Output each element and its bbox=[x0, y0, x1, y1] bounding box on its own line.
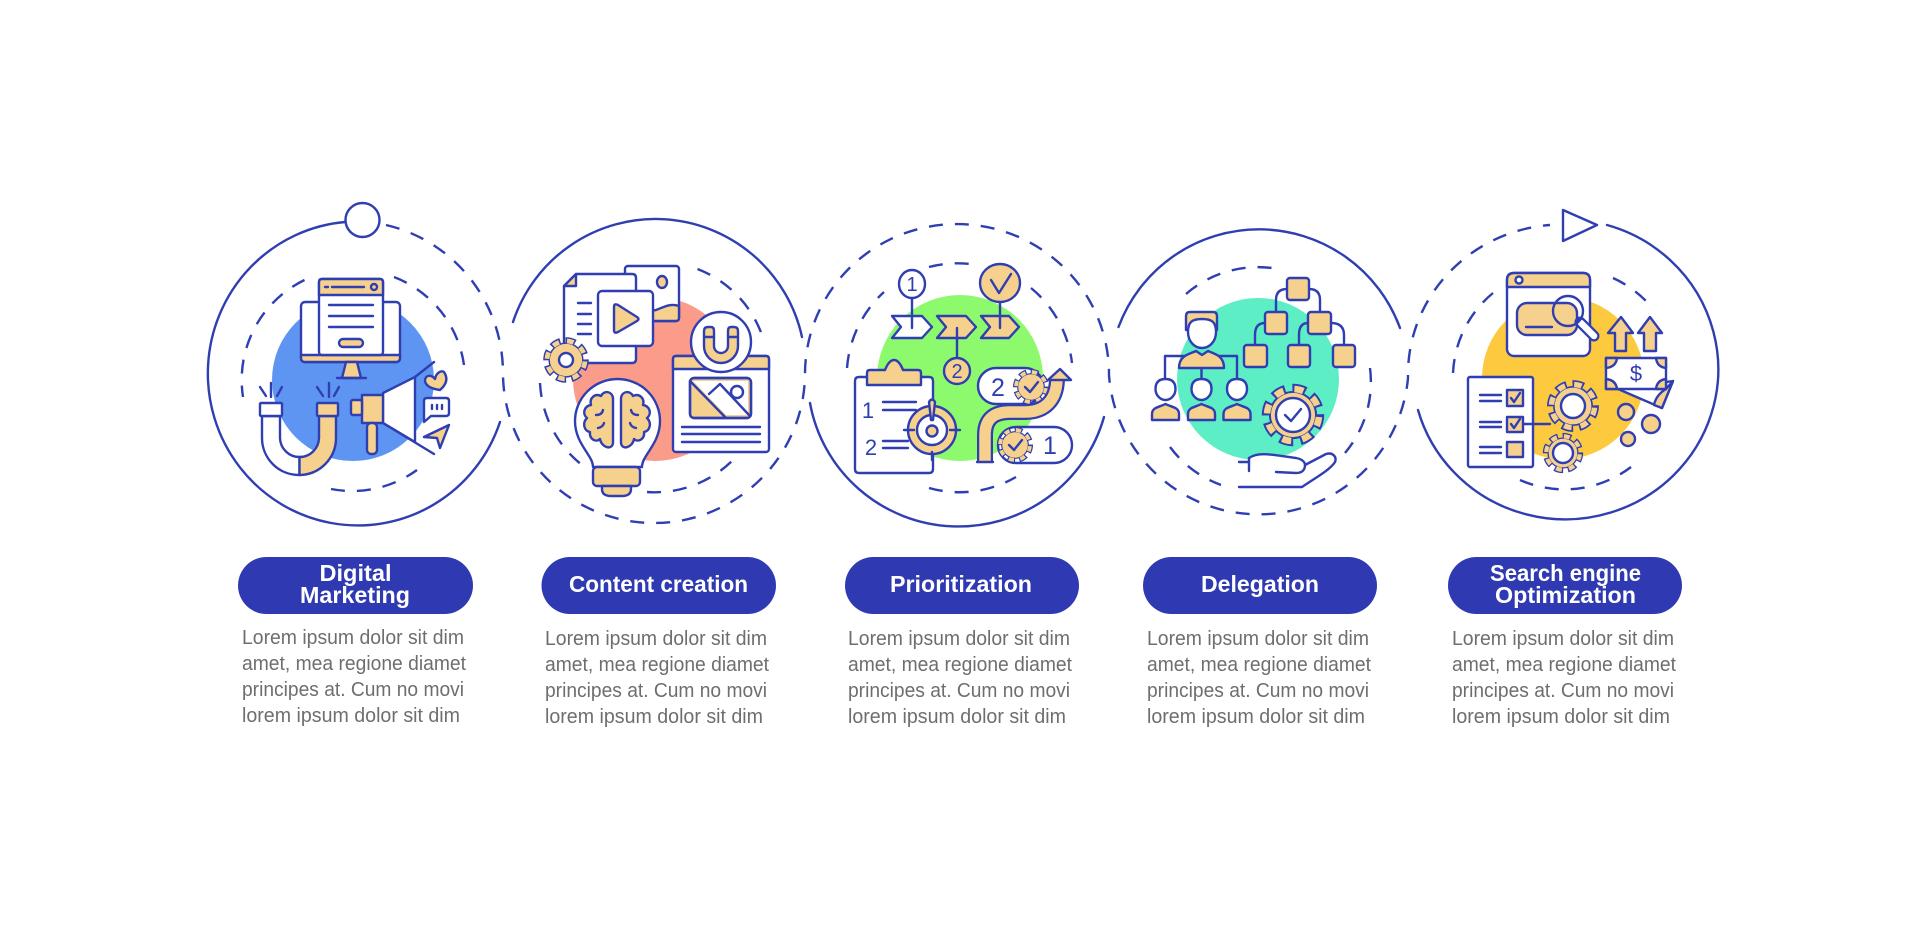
text block: Delegation: lorem ipsum dolor sit dim bbox=[1147, 706, 1365, 728]
text block: Prioritization: amet, mea regione diamet bbox=[848, 654, 1072, 676]
icon: megaphone bbox=[351, 362, 434, 454]
heading pill: Delegation: Delegation bbox=[1201, 571, 1319, 597]
icon: browser search bbox=[1507, 273, 1594, 356]
icon: clipboard with target: 2 bbox=[865, 435, 877, 460]
icon: document bbox=[564, 274, 636, 363]
solid connector arcs bbox=[208, 219, 1718, 526]
icon: magnet badge bbox=[691, 312, 751, 372]
text block: Prioritization: lorem ipsum dolor sit dim bbox=[848, 706, 1066, 728]
heading pill: Prioritization: Prioritization bbox=[890, 571, 1032, 597]
icon: step badge 2 bbox=[944, 358, 970, 384]
text block: Search engine Optimization: principes at. Cum no movi bbox=[1452, 680, 1674, 702]
panel: Delegation bbox=[1152, 267, 1371, 487]
dashed connector path bbox=[386, 224, 1550, 523]
inner dashed ring bbox=[242, 277, 464, 491]
text block: Content creation: principes at. Cum no movi bbox=[545, 680, 767, 702]
green blob bbox=[877, 295, 1043, 461]
icon: light bulb with brain bbox=[575, 379, 660, 496]
icon: gear bbox=[547, 341, 585, 379]
icon: paper plane bbox=[424, 425, 449, 448]
icon: priority pill 2: 2 bbox=[991, 374, 1005, 402]
heading pill: Digital Marketing bbox=[238, 557, 473, 614]
icon: magnet bbox=[260, 383, 339, 475]
icon: priority pill 2 bbox=[978, 368, 1046, 404]
text block: Prioritization: Lorem ipsum dolor sit dim bbox=[848, 628, 1070, 650]
text block: Prioritization bbox=[848, 628, 1072, 728]
icon: open hand bbox=[1239, 454, 1336, 487]
text block: Delegation: amet, mea regione diamet bbox=[1147, 654, 1371, 676]
panel: Search engine Optimization bbox=[1453, 273, 1673, 489]
heading pill: Prioritization bbox=[845, 557, 1079, 614]
red blob bbox=[573, 297, 737, 461]
teal blob bbox=[1177, 298, 1339, 460]
text block: Delegation: principes at. Cum no movi bbox=[1147, 680, 1369, 702]
icon: gears bbox=[1546, 384, 1595, 470]
panel: Prioritization bbox=[847, 263, 1072, 492]
icon: video card bbox=[598, 291, 653, 346]
text block: Content creation: lorem ipsum dolor sit dim bbox=[545, 706, 763, 728]
heading pill: Search engine Optimization: Search engine bbox=[1490, 560, 1641, 586]
blue blob bbox=[272, 299, 434, 461]
text block: Search engine Optimization: lorem ipsum dolor sit dim bbox=[1452, 706, 1670, 728]
icon: money bills bbox=[1606, 358, 1673, 408]
icon: gear with check bbox=[1000, 430, 1030, 460]
inner dashed ring bbox=[540, 269, 762, 492]
icon: org chart bbox=[1244, 278, 1355, 367]
icon: step badge 1 bbox=[899, 270, 925, 298]
text block: Delegation: Lorem ipsum dolor sit dim bbox=[1147, 628, 1369, 650]
start marker circle bbox=[346, 203, 380, 237]
icon: gear with check bbox=[1267, 389, 1319, 441]
icon: curved arrow bbox=[977, 369, 1071, 462]
text block: Digital Marketing bbox=[242, 627, 466, 727]
heading pill: Content creation: Content creation bbox=[569, 571, 748, 597]
panel: Content creation bbox=[540, 266, 769, 496]
panel: Digital Marketing bbox=[242, 277, 464, 491]
icon: check badge bbox=[980, 264, 1020, 302]
icon: clipboard with target: 1 bbox=[862, 398, 874, 423]
yellow blob bbox=[1482, 297, 1644, 459]
heading pill: Delegation bbox=[1143, 557, 1377, 614]
text block: Digital Marketing: amet, mea regione diamet bbox=[242, 653, 466, 675]
icon: team tree bbox=[1152, 312, 1250, 420]
icon: priority pill 1 bbox=[998, 427, 1072, 463]
icon: image article bbox=[673, 356, 769, 452]
text block: Prioritization: principes at. Cum no movi bbox=[848, 680, 1070, 702]
heading pill: Digital Marketing: Digital bbox=[320, 560, 392, 586]
icon: step chevrons bbox=[892, 298, 1019, 358]
text block: Digital Marketing: lorem ipsum dolor sit dim bbox=[242, 705, 460, 727]
text block: Delegation bbox=[1147, 628, 1371, 728]
heading pill: Content creation bbox=[542, 557, 776, 614]
icon: monitor with web page bbox=[301, 279, 400, 378]
text block: Digital Marketing: Lorem ipsum dolor sit dim bbox=[242, 627, 464, 649]
text block: Content creation bbox=[545, 628, 769, 728]
icon: priority pill 1: 1 bbox=[1043, 432, 1057, 460]
text block: Search engine Optimization: amet, mea regione diamet bbox=[1452, 654, 1676, 676]
icon: checklist bbox=[1468, 377, 1550, 467]
end marker triangle bbox=[1563, 210, 1597, 241]
icon: photo card bbox=[625, 266, 679, 321]
text block: Digital Marketing: principes at. Cum no movi bbox=[242, 679, 464, 701]
text block: Content creation: amet, mea regione diamet bbox=[545, 654, 769, 676]
icon: step badge 1: 1 bbox=[906, 274, 918, 296]
icon: coins bbox=[1618, 404, 1660, 446]
heading pill: Search engine Optimization bbox=[1448, 557, 1682, 614]
icon: money bills: $ bbox=[1630, 361, 1642, 386]
icon: clipboard with target bbox=[855, 360, 960, 473]
icon: heart bbox=[425, 371, 446, 390]
icon: step badge 2: 2 bbox=[951, 361, 963, 383]
inner dashed ring bbox=[847, 263, 1072, 492]
heading pill: Digital Marketing: Marketing bbox=[300, 582, 410, 608]
text block: Search engine Optimization bbox=[1452, 628, 1676, 728]
text block: Search engine Optimization: Lorem ipsum dolor sit dim bbox=[1452, 628, 1674, 650]
inner dashed ring bbox=[1170, 267, 1371, 485]
heading pill: Search engine Optimization: Optimization bbox=[1495, 582, 1636, 608]
icon: growth arrows bbox=[1608, 317, 1662, 351]
inner dashed ring bbox=[1453, 278, 1647, 489]
text block: Content creation: Lorem ipsum dolor sit dim bbox=[545, 628, 767, 650]
icon: chat bubble bbox=[424, 398, 449, 422]
